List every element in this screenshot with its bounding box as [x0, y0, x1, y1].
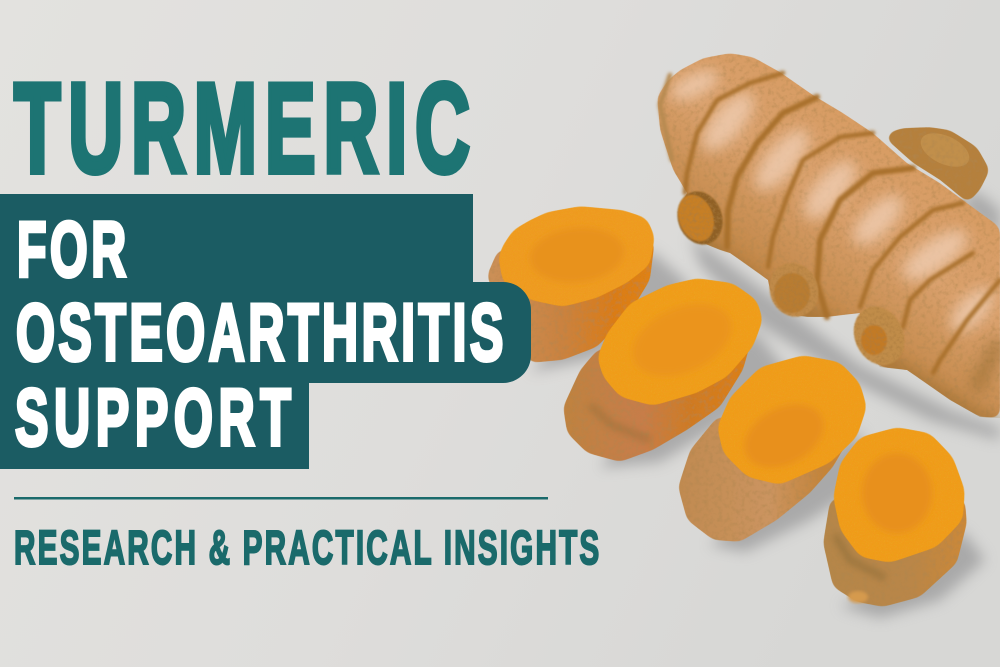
banner text: support: SUPPORT	[15, 373, 291, 463]
banner background	[0, 194, 531, 469]
knob 3	[845, 299, 913, 373]
slice 1	[487, 206, 655, 363]
heading banner	[0, 194, 531, 469]
banner text: osteoarthritis: OSTEOARTHRITIS	[16, 288, 503, 378]
turmeric illustration	[487, 53, 1000, 618]
knob 1	[670, 185, 730, 251]
slice 4	[823, 427, 967, 607]
slice 2	[563, 278, 763, 462]
cast shadows	[530, 190, 1000, 618]
subtitle: RESEARCH & PRACTICAL INSIGHTS	[14, 522, 599, 575]
main turmeric root	[657, 53, 1000, 425]
title: turmeric: TURMERIC	[14, 58, 470, 200]
side branch of root	[885, 126, 990, 203]
root highlights and shading	[667, 64, 1000, 425]
knob 2	[762, 256, 826, 324]
root body	[657, 53, 1000, 418]
banner text: for: FOR	[17, 205, 126, 293]
root ridges	[660, 73, 1000, 373]
divider line	[14, 497, 548, 500]
slice 3	[678, 355, 867, 542]
